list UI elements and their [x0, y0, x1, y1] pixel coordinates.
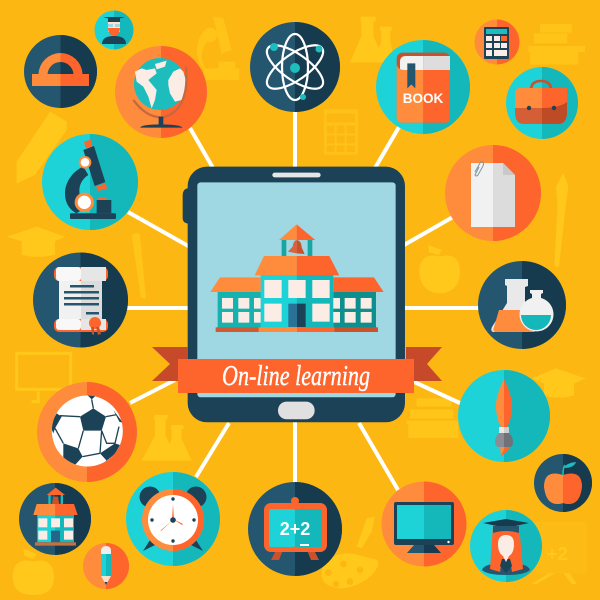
ghost: apple right [419, 245, 460, 293]
icon: paper document [445, 145, 541, 241]
icon: book [376, 40, 470, 134]
ghost: pencil [17, 112, 67, 183]
icon: globe [115, 46, 207, 138]
ghost: chalkboard [532, 523, 586, 584]
icon: calculator [474, 20, 520, 64]
school building [210, 224, 384, 332]
ghost: microscope [197, 17, 239, 80]
icon: pencil [83, 543, 129, 589]
ribbon title: On-line learning [222, 361, 370, 392]
icon: student avatar [94, 10, 134, 50]
tablet body [183, 167, 405, 422]
icon: school small [19, 483, 91, 555]
ghost: graduation cap left [7, 227, 65, 257]
ghost: apple bottom left [13, 548, 54, 595]
ghost: fountain pen [554, 173, 568, 267]
ribbon banner [152, 347, 442, 393]
ghost: books top [528, 24, 585, 65]
ghost: palette [322, 517, 378, 588]
ghost: calculator [324, 109, 358, 154]
icon: protractor [24, 35, 97, 108]
ghost: monitor [17, 353, 71, 402]
book label: BOOK [403, 91, 444, 106]
connector lines [125, 110, 480, 490]
ghost: chalkboard: +2 [547, 543, 568, 564]
icon: alarm clock [126, 472, 220, 566]
icon: apple [534, 454, 592, 512]
tablet with school illustration [183, 167, 405, 422]
ghost: flasks bottom [142, 415, 192, 461]
icon: monitor [382, 482, 466, 566]
icon: paint brush [458, 370, 550, 462]
icon: briefcase [506, 67, 578, 139]
ghost: pen [132, 233, 146, 298]
ghost: books bottom [407, 398, 458, 438]
chalkboard sum: 2+2 [280, 519, 310, 539]
icon: microscope [42, 134, 138, 230]
icon: chalkboard [248, 482, 342, 576]
icon: diploma [33, 252, 128, 348]
ghost: graduation cap right [532, 368, 586, 398]
icon: flasks [478, 261, 566, 349]
icon: atom [250, 22, 340, 112]
icon: soccer ball [37, 382, 137, 482]
icon: graduate woman [470, 510, 542, 582]
ghost: flasks top [350, 17, 395, 62]
